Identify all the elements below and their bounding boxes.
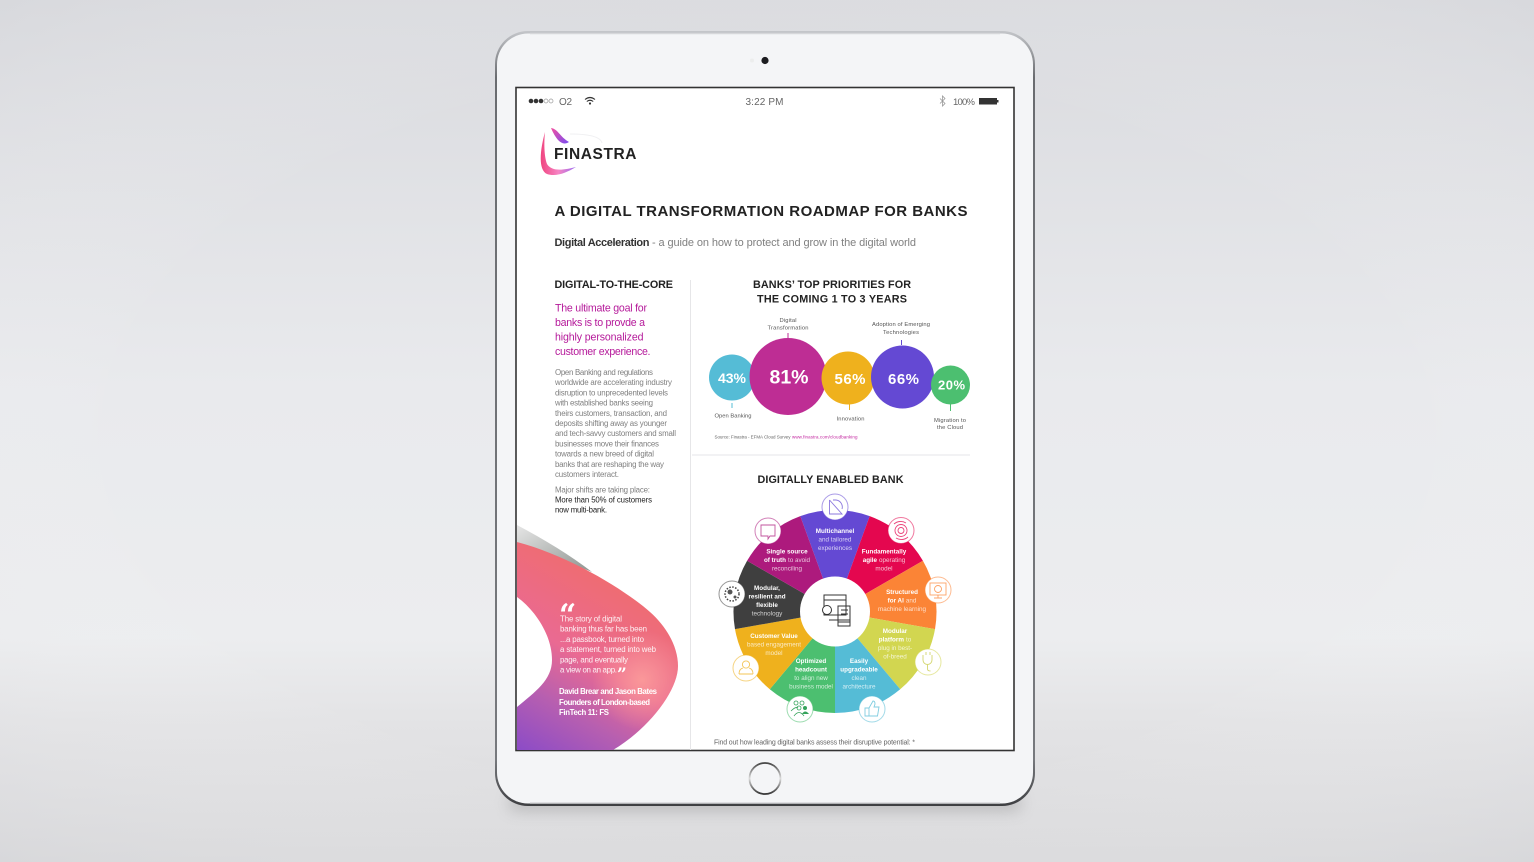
bubble 66% [871, 322, 934, 408]
bubble 56%: 56% [834, 371, 866, 388]
quote text: ...a passbook, turned into [560, 635, 645, 644]
label: multichannel: experiences [818, 545, 852, 552]
bubble 56% [822, 352, 874, 422]
body text: theirs customers, transaction, and [555, 409, 667, 418]
label: upgradeable [840, 658, 878, 690]
label: modular platform: plug in best- [878, 645, 912, 652]
attribution: Founders of London-based [559, 698, 650, 707]
wheel [733, 510, 937, 713]
heading: THE COMING 1 TO 3 YEARS [757, 294, 907, 306]
status bar: O2 [559, 97, 572, 108]
body text: Open Banking and regulations [555, 368, 653, 377]
bold stat: More than 50% of customers [555, 496, 652, 504]
label: upgradeable: upgradeable [840, 666, 878, 674]
label: modular platform: platform to [879, 636, 912, 644]
panel: top priorities [709, 279, 970, 440]
quote text: The story of digital [560, 614, 622, 624]
heading: BANKS’ TOP PRIORITIES FOR [753, 279, 911, 291]
label: headcount: Optimized [796, 658, 826, 665]
body text: businesses move their finances [555, 439, 659, 448]
label: modular resilient [748, 585, 786, 618]
bubble 56%: Innovation [836, 416, 864, 422]
label: single source: of truth to avoid [764, 557, 811, 564]
source [714, 434, 858, 440]
body text: disruption to unprecedented levels [555, 388, 668, 397]
bubble 81% [750, 318, 826, 415]
dividers [690, 280, 970, 750]
label: AI: Structured [886, 589, 918, 596]
attribution [559, 687, 658, 717]
body text: and tech-savvy customers and small [555, 429, 676, 438]
quote panel [517, 525, 678, 750]
label: agile: Fundamentally [862, 548, 907, 556]
footer note: Find out how leading digital banks assess their disruptive potential: * [714, 740, 915, 746]
subtitle: Digital Acceleration [554, 237, 650, 249]
bubble 66%: Technologies [883, 330, 919, 336]
label: AI [878, 589, 926, 613]
icon: plug [915, 649, 941, 675]
label: headcount: business model [789, 684, 833, 690]
subtitle: - a guide on how to protect and grow in the digital world [652, 237, 916, 249]
tablet device frame [495, 31, 1035, 809]
screen [516, 88, 1014, 750]
label: modular platform: Modular [883, 628, 908, 635]
icon: people [787, 696, 813, 722]
body text: with established banks seeing [554, 399, 653, 408]
label: modular resilient: Modular, [754, 585, 780, 592]
icon: chat [755, 518, 781, 544]
pink intro: banks is to provde a [555, 317, 645, 329]
quote text: page, and eventually [560, 655, 628, 664]
label: multichannel: and tailored [819, 536, 852, 544]
label: headcount: to align new [794, 675, 828, 682]
label: agile: agile operating [863, 557, 906, 564]
panel: digitally enabled bank [719, 474, 951, 722]
title: A DIGITAL TRANSFORMATION ROADMAP FOR BANKS [554, 203, 968, 220]
icon: AI [925, 577, 951, 603]
panel: digital-to-the-core [554, 279, 676, 514]
attribution: David Brear and Jason Bates [559, 687, 658, 696]
label: upgradeable: Easily [850, 658, 869, 665]
label: customer value: based engagement [747, 642, 801, 648]
pink intro [555, 302, 650, 358]
status bar [529, 96, 998, 108]
bold stat: now multi-bank. [555, 506, 607, 514]
pink intro: highly personalized [555, 332, 644, 344]
body text: worldwide are accelerating industry [554, 378, 672, 387]
label: headcount [789, 658, 833, 690]
heading: DIGITALLY ENABLED BANK [758, 474, 904, 486]
label: modular platform: of-breed [883, 654, 907, 660]
camera [750, 57, 769, 64]
body text [554, 368, 676, 494]
label: AI: machine learning [878, 606, 926, 613]
label: multichannel [816, 528, 854, 552]
quote mark: “ [559, 598, 576, 633]
pink intro: customer experience. [555, 346, 650, 358]
bubble 43% [709, 354, 755, 420]
bubble 81%: 81% [770, 366, 808, 388]
quote text: banking thus far has been [560, 625, 647, 634]
body text: customers interact. [555, 470, 619, 479]
icon: multichannel [822, 494, 848, 520]
icon: thumbs up [859, 696, 885, 722]
segment labels [747, 528, 926, 690]
center icon [822, 595, 850, 626]
quote text: a statement, turned into web [560, 645, 657, 654]
icon: agile [888, 518, 914, 544]
label: upgradeable: clean [851, 675, 867, 682]
quote panel: ” [617, 665, 627, 685]
bubble 20%: the Cloud [937, 425, 963, 431]
body text: deposits shifting away as younger [555, 419, 667, 428]
body text: Major shifts are taking place: [555, 486, 650, 494]
logo [541, 128, 636, 175]
quote text: a view on an app. [560, 666, 617, 674]
logo: FINASTRA [554, 146, 636, 163]
heading: DIGITAL-TO-THE-CORE [554, 279, 673, 291]
label: customer value [747, 633, 801, 657]
label: modular resilient: resilient and [748, 594, 786, 600]
pink intro: The ultimate goal for [555, 302, 647, 314]
label: customer value: model [765, 650, 783, 657]
label: agile: model [875, 566, 893, 572]
bubble 43%: 43% [718, 370, 747, 386]
label: modular resilient: technology [752, 610, 783, 618]
icon: person [733, 655, 759, 681]
bubble 66%: 66% [888, 371, 919, 388]
bubble 20%: Migration to [934, 418, 966, 424]
source: Source: Finastra - EFMA Cloud Survey [714, 434, 791, 440]
label: single source: reconciling [772, 566, 803, 572]
bubble 20% [931, 366, 970, 431]
attribution: FinTech 11: FS [559, 708, 609, 717]
label: single source: Single source [766, 548, 808, 556]
label: headcount: headcount [795, 666, 828, 674]
status bar: 3:22 PM [746, 97, 784, 108]
heading [753, 279, 911, 306]
bubble 20%: 20% [938, 378, 965, 392]
label: customer value: Customer Value [750, 633, 798, 640]
body text: banks that are reshaping the way [555, 460, 664, 469]
label: upgradeable: architecture [843, 684, 876, 690]
label: modular resilient: flexible [756, 602, 778, 609]
label: single source [764, 548, 811, 572]
label: agile [862, 548, 907, 572]
quote text [560, 614, 657, 674]
label: AI: for AI and [888, 598, 917, 604]
bubble 43%: Open Banking [714, 414, 752, 420]
bubble 66%: Adoption of Emerging [872, 322, 930, 328]
icon: globe [719, 581, 745, 607]
body text: towards a new breed of digital [555, 450, 654, 459]
bubble 81%: Transformation [768, 326, 808, 332]
bubble 81%: Digital [780, 318, 796, 324]
status bar: 100% [953, 97, 976, 108]
source: www.finastra.com/cloudbanking [792, 434, 858, 440]
label: multichannel: Multichannel [816, 528, 854, 535]
home button [750, 763, 780, 794]
label: modular platform [878, 628, 912, 660]
bold stat [555, 496, 652, 514]
